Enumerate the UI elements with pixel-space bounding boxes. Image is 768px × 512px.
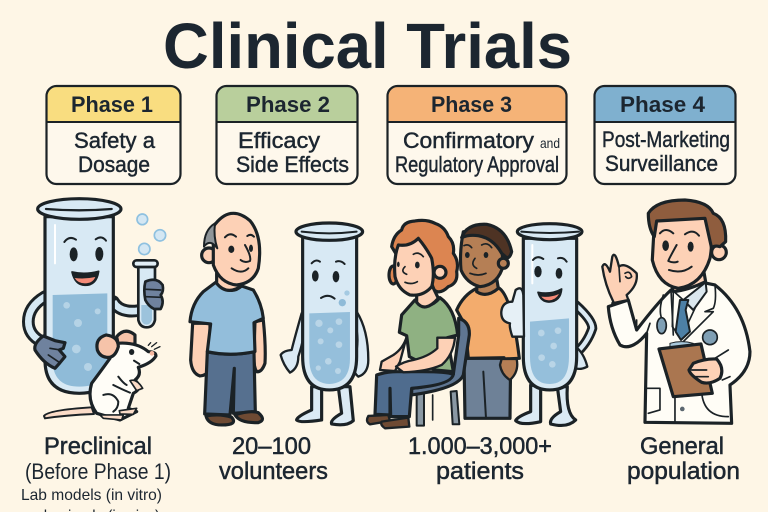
label: phase 3 participants: patients <box>436 458 524 485</box>
panel: phase 4: Phase 4 <box>620 92 705 117</box>
label: phase 4 participants: population <box>627 458 740 485</box>
illustration: lab mouse <box>44 331 160 420</box>
panel: phase 1: Dosage <box>78 152 150 177</box>
panel: phase 2: Side Effects <box>236 152 349 177</box>
panel: phase 3: Phase 3 <box>431 92 512 117</box>
label: preclinical: Preclinical <box>44 433 152 460</box>
panel: phase 4: Surveillance <box>605 151 718 176</box>
panel: phase 4 <box>594 86 736 184</box>
chair <box>412 318 469 426</box>
panel: phase 3: Confirmatory <box>403 128 534 153</box>
label: preclinical <box>21 433 171 512</box>
panel: phase 3 <box>388 86 566 184</box>
man standing <box>457 224 519 418</box>
panel: phase 3: Regulatory Approval <box>395 152 559 177</box>
label: phase 3 participants <box>408 433 552 485</box>
panel: phase 2: Phase 2 <box>246 92 330 117</box>
title: Clinical Trials <box>163 10 572 82</box>
label: phase 3 participants: 1.000–3,000+ <box>408 433 552 460</box>
happy test tube <box>501 224 592 425</box>
label: phase 2 participants: volunteers <box>219 458 328 485</box>
panel: phase 1: Phase 1 <box>71 92 153 117</box>
illustration: doctor with clipboard <box>602 200 750 423</box>
panel: phase 3: and <box>540 135 560 151</box>
label: preclinical: (Before Phase 1) <box>25 459 171 484</box>
panel: phase 1 <box>46 86 181 184</box>
illustration: seated patients with test tube <box>367 220 592 428</box>
panel: phase 2 <box>216 86 358 184</box>
illustration: preclinical test tube mascot <box>28 199 166 420</box>
woman seated <box>367 220 458 428</box>
panel: phase 2: Efficacy <box>238 128 320 153</box>
label: preclinical: Lab models (in vitro) <box>21 487 162 504</box>
panel: phase 1: Safety a <box>74 128 156 153</box>
label: phase 4 participants: General <box>640 433 724 460</box>
illustration: bald volunteer <box>190 213 265 425</box>
label: phase 4 participants <box>627 433 740 485</box>
panel: phase 4: Post-Marketing <box>602 127 730 152</box>
illustration: worried test tube mascot <box>281 223 368 425</box>
label: phase 2 participants: 20–100 <box>232 433 311 460</box>
label: phase 2 participants <box>219 433 328 485</box>
